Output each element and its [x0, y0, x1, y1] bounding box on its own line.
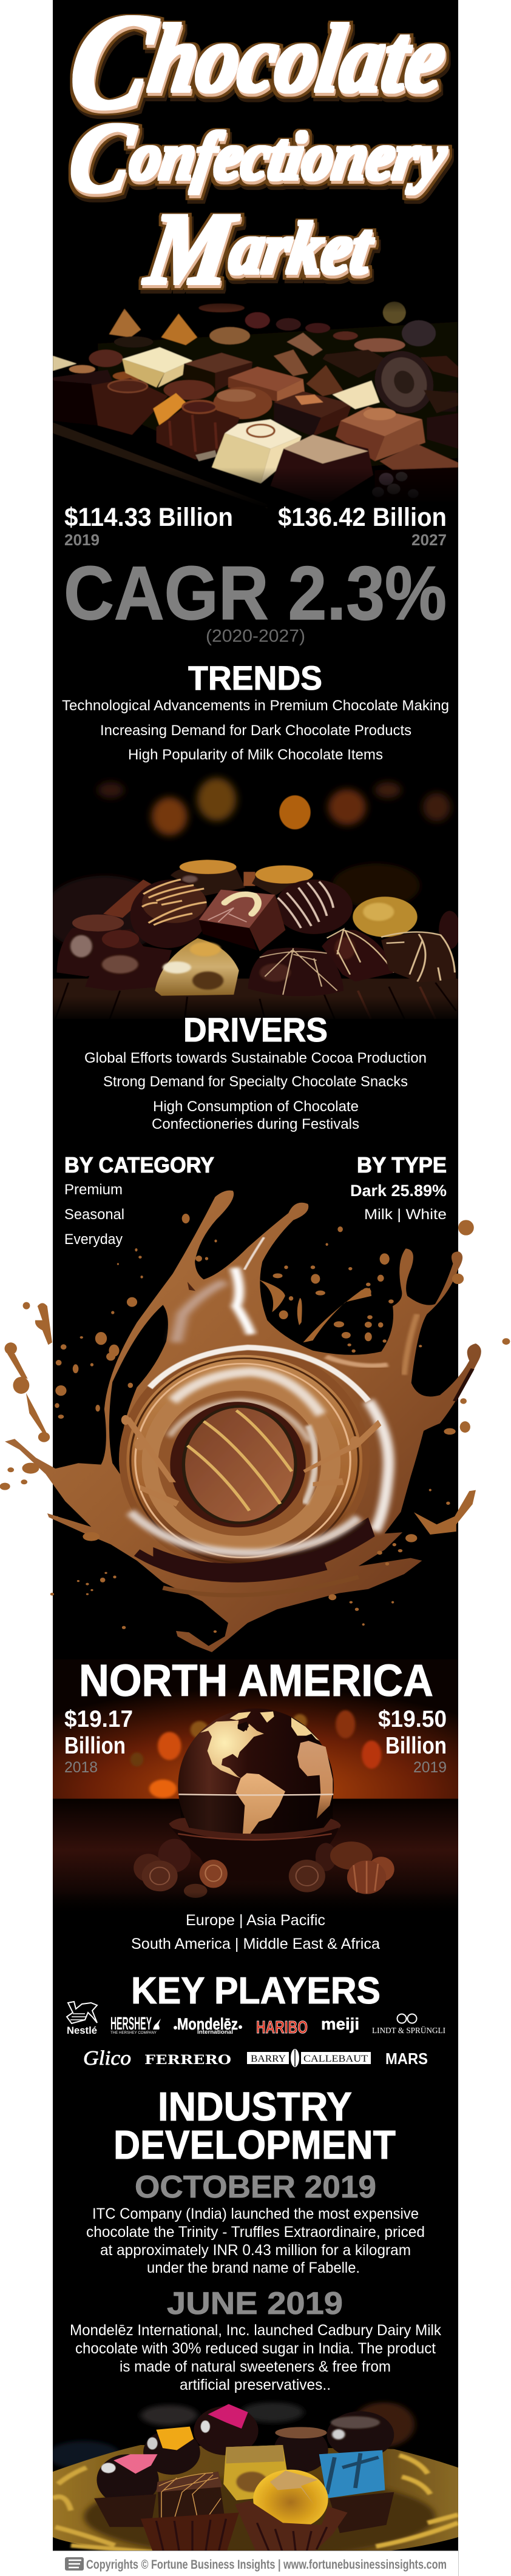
- heading: industry development: [113, 2084, 396, 2168]
- development: june 2019: [70, 2286, 441, 2393]
- heading: drivers: DRIVERS: [183, 1011, 328, 1049]
- market size 2019: 2019: [64, 531, 100, 549]
- by category: Seasonal: [64, 1206, 124, 1223]
- other regions: Europe | Asia Pacific: [186, 1912, 325, 1929]
- logo: Mondelez: International: [197, 2029, 233, 2035]
- logo: Mars: MARS: [385, 2050, 428, 2068]
- development: october 2019: under the brand name of Fabelle.: [147, 2259, 360, 2276]
- heading: drivers: High Consumption of Chocolate: [153, 1098, 359, 1115]
- heading: drivers: Global Efforts towards Sustainable Cocoa Production: [84, 1050, 427, 1066]
- north america 2019 value: 2019: [413, 1759, 447, 1776]
- development: june 2019: chocolate with 30% reduced sugar in India. The product: [75, 2340, 436, 2357]
- by type: [350, 1152, 447, 1223]
- heading: drivers: [84, 1011, 427, 1132]
- photo: chocolate splash: [0, 1191, 510, 1652]
- panel: black background: [53, 0, 458, 2551]
- icon: Fortune Business Insights: [65, 2557, 84, 2571]
- heading: industry development: DEVELOPMENT: [113, 2122, 396, 2168]
- splash body: [5, 1191, 481, 1652]
- heading: industry development: INDUSTRY: [158, 2084, 352, 2130]
- photo: assorted chocolates: [53, 284, 458, 508]
- by type: Dark 25.89%: [350, 1182, 447, 1200]
- logo: Barry Callebaut: [247, 2049, 371, 2067]
- by category: Premium: [64, 1182, 123, 1198]
- heading: trends: Technological Advancements in Premium Chocolate Making: [62, 698, 449, 714]
- north america 2018 value: Billion: [64, 1733, 126, 1759]
- truffles: [42, 847, 461, 1023]
- splash swirl rings: [119, 1345, 388, 1595]
- north america 2018 value: 2018: [64, 1759, 98, 1776]
- splash droplets: [0, 1214, 510, 1633]
- development: october 2019: ITC Company (India) launched the most expensive: [92, 2205, 419, 2222]
- by category: Everyday: [64, 1231, 123, 1248]
- bokeh lights: [98, 778, 450, 836]
- heading: trends: [62, 659, 449, 763]
- heading: key players: KEY PLAYERS: [131, 1970, 381, 2012]
- heading: trends: TRENDS: [188, 659, 322, 697]
- north america 2019 value: [378, 1706, 447, 1776]
- development: october 2019: chocolate the Trinity - Truffles Extraordinaire, priced: [86, 2224, 425, 2241]
- globe and bowl: [169, 1709, 341, 1880]
- development: june 2019: JUNE 2019: [167, 2286, 343, 2321]
- logo: Lindt: [372, 2014, 445, 2036]
- title: M: [139, 192, 243, 306]
- truffles around bowl: [134, 1839, 394, 1898]
- north america 2018 value: [64, 1706, 133, 1776]
- development: june 2019: is made of natural sweeteners & free from: [120, 2358, 391, 2375]
- title: [61, 0, 456, 306]
- title: arket: [225, 207, 379, 289]
- footer: [53, 2551, 459, 2576]
- photo: bokeh truffles: [42, 778, 461, 1023]
- north america heading: NORTH AMERICA: [79, 1655, 433, 1706]
- CAGR: CAGR 2.3%: [64, 551, 447, 636]
- other regions: South America | Middle East & Africa: [131, 1935, 380, 1952]
- heading: drivers: Strong Demand for Specialty Chocolate Snacks: [103, 1074, 408, 1090]
- logo: Meiji: meiji: [321, 2015, 359, 2033]
- by category: [64, 1152, 214, 1248]
- north america 2019 value: $19.50: [378, 1706, 447, 1732]
- development: october 2019: OCTOBER 2019: [135, 2170, 376, 2205]
- by category: BY CATEGORY: [64, 1152, 214, 1177]
- development: october 2019: at approximately INR 0.43 million for a kilogram: [100, 2242, 411, 2259]
- title: C: [63, 102, 141, 213]
- logo: Hershey: THE HERSHEY COMPANY: [110, 2031, 157, 2035]
- logo: Hershey: [110, 2014, 161, 2035]
- photo: chocolate globe: [53, 1660, 458, 1914]
- market size 2027: [278, 503, 447, 549]
- north america 2019 value: Billion: [385, 1733, 447, 1759]
- logo: Lindt: LINDT & SPRÜNGLI: [372, 2025, 445, 2036]
- logo: Mondelez: Mondelēz: [177, 2015, 238, 2033]
- market size 2019: $114.33 Billion: [64, 503, 233, 532]
- logo: Haribo: HARIBO: [256, 2018, 308, 2037]
- heading: trends: High Popularity of Milk Chocolate Items: [128, 747, 383, 763]
- heading: trends: Increasing Demand for Dark Chocolate Products: [100, 722, 411, 739]
- logo: Nestle: Nestlé: [67, 2025, 97, 2036]
- heading: drivers: Confectioneries during Festivals: [152, 1116, 359, 1132]
- logo: Ferrero: FERRERO: [144, 2052, 231, 2067]
- logo: Hershey: HERSHEY: [110, 2014, 152, 2034]
- photo: colourful chocolates on plate: [47, 2395, 459, 2555]
- market size 2019: [64, 503, 233, 549]
- development: june 2019: Mondelēz International, Inc. launched Cadbury Dairy Milk: [70, 2322, 441, 2339]
- development: october 2019: [86, 2170, 425, 2276]
- logo: Barry Callebaut: BARRY: [251, 2054, 286, 2064]
- logos: key players: [67, 2002, 445, 2070]
- title: hocolate: [143, 5, 453, 112]
- by type: Milk | White: [364, 1206, 447, 1223]
- north america 2018 value: $19.17: [64, 1706, 133, 1732]
- logo: Barry Callebaut: CALLEBAUT: [303, 2054, 368, 2064]
- CAGR: (2020-2027): [206, 627, 305, 646]
- title: onfectionery: [126, 119, 452, 194]
- logo: Glico: Glico: [83, 2047, 131, 2070]
- globe backdrop: [53, 1660, 458, 1914]
- market size 2027: $136.42 Billion: [278, 503, 447, 532]
- development: june 2019: artificial preservatives..: [180, 2376, 331, 2393]
- by type: BY TYPE: [357, 1152, 447, 1177]
- other regions: [131, 1912, 380, 1952]
- splash hole: [109, 1305, 168, 1497]
- logo: Nestle: [67, 2002, 97, 2036]
- market size 2027: 2027: [411, 531, 447, 549]
- left margin droplets: [23, 1302, 30, 1310]
